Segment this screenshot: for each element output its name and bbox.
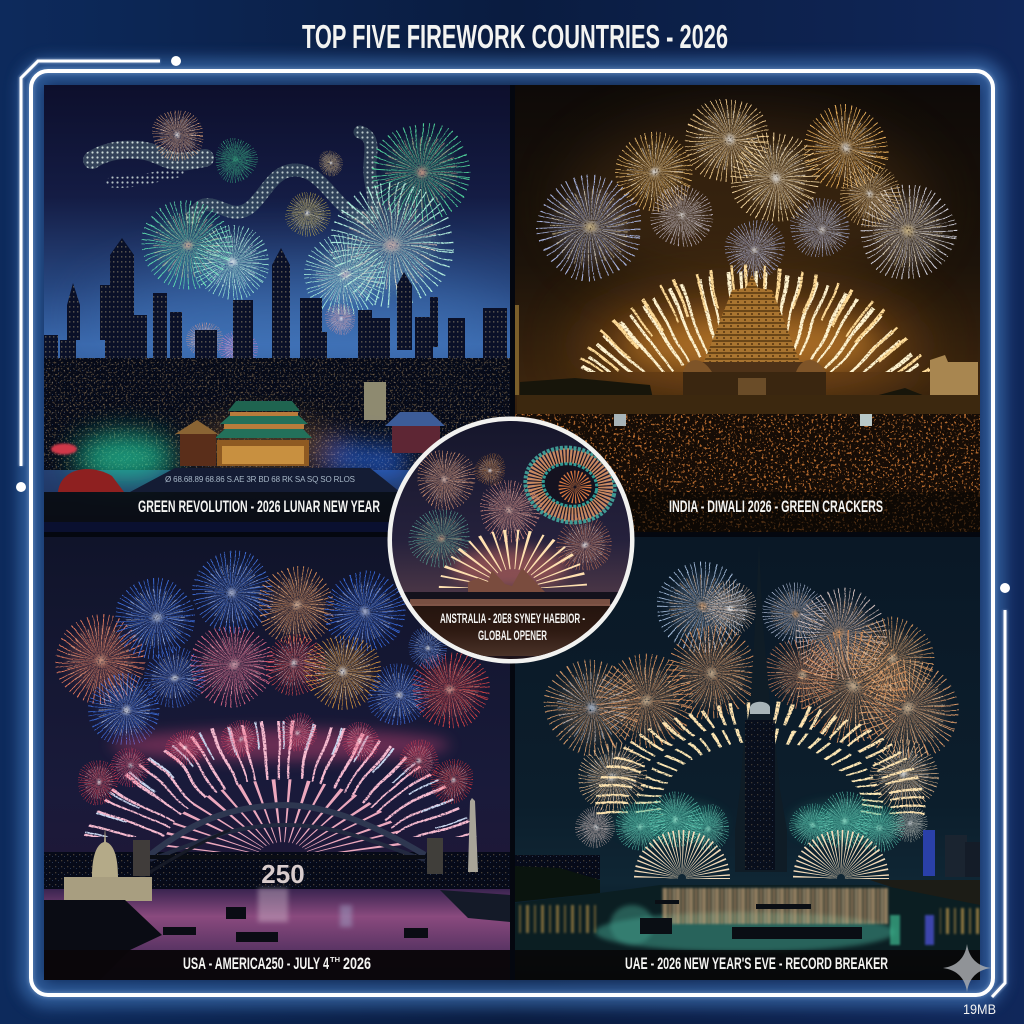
- trees and side buildings: [515, 305, 982, 415]
- caption band: [44, 950, 510, 980]
- pink fan: [84, 720, 477, 837]
- peach bursts around the tower: [551, 574, 953, 843]
- opera house: [468, 568, 545, 592]
- caption band: [515, 492, 980, 532]
- panel: UAE New Year's Eve: [515, 537, 980, 980]
- crowd: [515, 414, 980, 532]
- skyscrapers: [44, 238, 507, 390]
- water with reflections: [515, 885, 980, 952]
- ring of light: [523, 446, 617, 524]
- caption band: [44, 492, 510, 522]
- caption: TH: [330, 957, 340, 964]
- small red bursts: [84, 720, 467, 796]
- watermark star: [943, 944, 991, 992]
- panel: India Diwali: [515, 85, 980, 532]
- road with sign text: [130, 468, 400, 492]
- outer bracket top left: [21, 61, 160, 466]
- vertical and horizontal dividers: [44, 85, 980, 980]
- caption band: [515, 950, 980, 980]
- panel: USA America250: [44, 537, 510, 980]
- caption: ANSTRALIA - 20E8 SYNEY HAEBIOR -: [440, 611, 585, 626]
- centre circle: Australia Sydney Harbor: [389, 418, 633, 662]
- bridge: [133, 805, 443, 878]
- temple: [650, 274, 855, 410]
- golden fountain fan: [580, 264, 930, 372]
- lower fan under arch: [208, 811, 358, 909]
- water: [44, 888, 510, 950]
- cream ring fan: [595, 702, 926, 815]
- caption: 2026: [343, 955, 371, 973]
- teal bursts and low fountains: [612, 792, 906, 879]
- obelisk: [468, 798, 478, 872]
- centre circle: Australia Sydney Harbor: GLOBAL OPENER: [478, 628, 547, 643]
- frame node dots: [16, 56, 1010, 593]
- title: TOP FIVE FIREWORK COUNTRIES - 2026: [302, 18, 728, 55]
- green and blue ground glows: [75, 420, 409, 482]
- capitol: [64, 827, 152, 901]
- caption: USA - AMERICA250 - JULY 4: [183, 955, 330, 973]
- harbour: [404, 592, 618, 604]
- tower: [735, 542, 787, 872]
- tower windows: [745, 702, 775, 870]
- Sydney bursts: [418, 455, 611, 571]
- dragon made of drones: [92, 132, 375, 218]
- palace: [175, 401, 445, 466]
- caption band: [412, 606, 610, 656]
- golden and blue bursts: [549, 109, 944, 279]
- 250 sign: 250: [261, 859, 305, 889]
- file size label: 19MB: [963, 1001, 996, 1017]
- fireworks over the skyline: [148, 119, 459, 361]
- lower city blocks: [44, 358, 510, 470]
- red dome and lantern: [51, 444, 124, 492]
- boats: [640, 900, 862, 939]
- skyline strip: [44, 852, 510, 890]
- outer bracket bottom right: [992, 610, 1005, 997]
- caption: GREEN REVOLUTION - 2026 LUNAR NEW YEAR: [138, 498, 380, 516]
- far city and shore: [515, 830, 980, 908]
- colourful bursts: [65, 557, 481, 738]
- shore and boats: [44, 890, 510, 980]
- fan over opera house: [452, 548, 568, 631]
- road with sign text: Ø 68.68.89 68.86 S.AE 3R BD 68 RK SA SQ SO RLOS: [165, 475, 355, 484]
- panel: China lunar new year: [44, 85, 510, 532]
